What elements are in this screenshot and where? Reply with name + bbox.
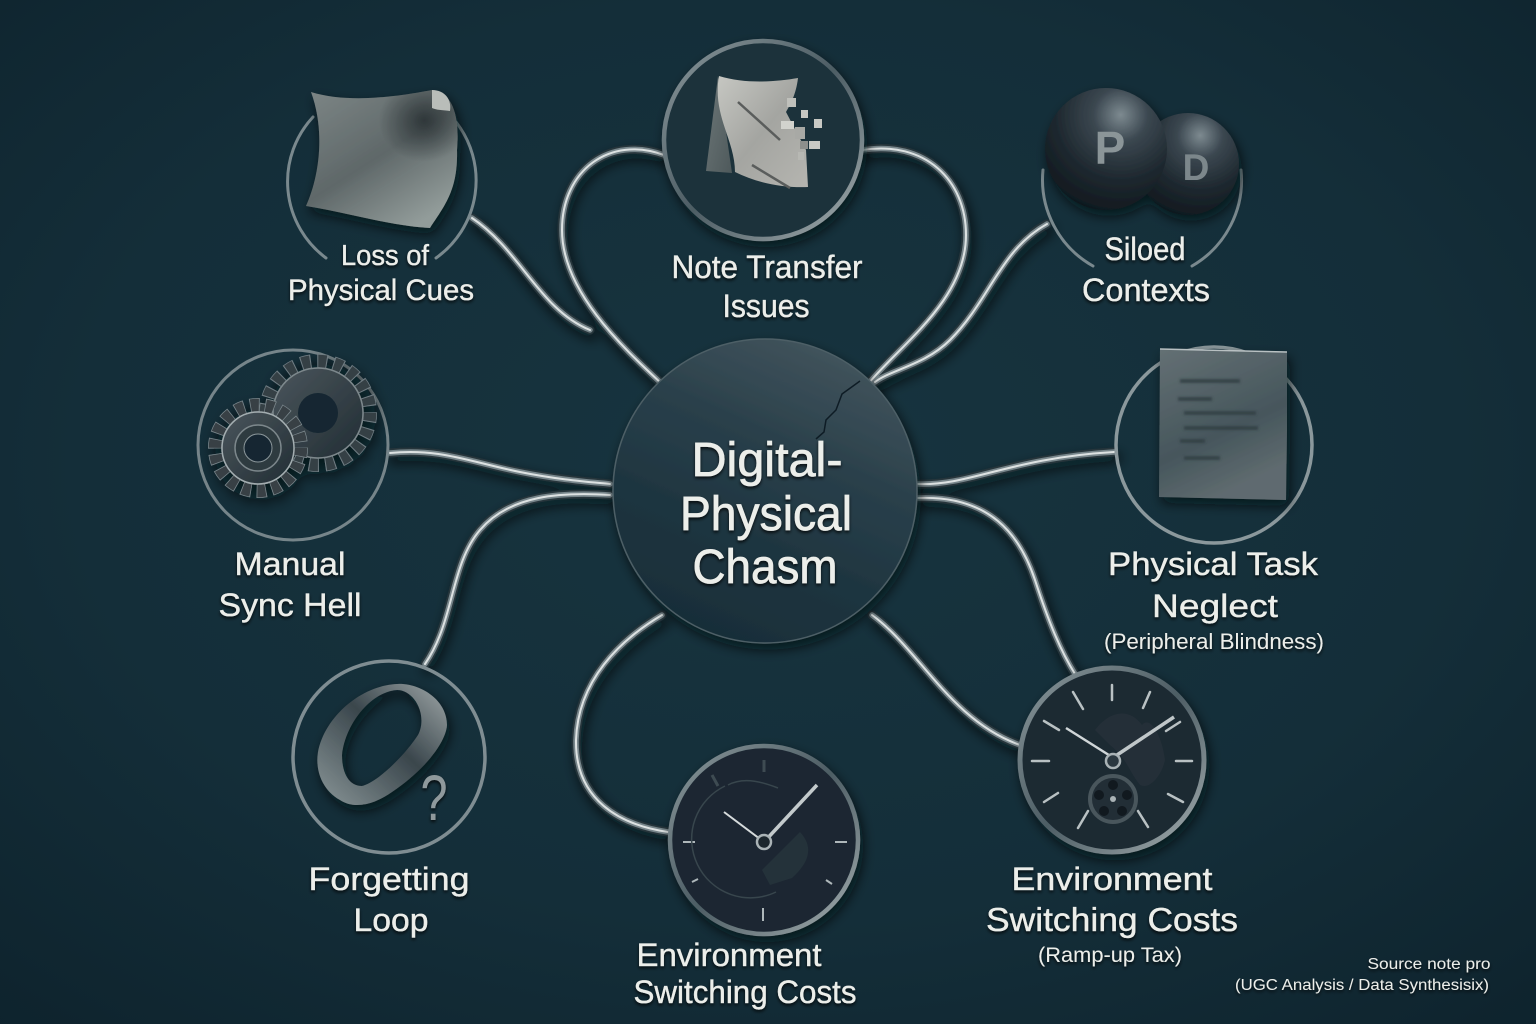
node: Environment Switching Costs (Ramp-up Tax): (Ramp-up Tax): [1038, 944, 1182, 967]
node: Environment Switching Costs (bottom): Environment: [636, 937, 822, 973]
source note: (UGC Analysis / Data Synthesisix): [1235, 977, 1489, 994]
icon: P and D spheres: D: [1183, 147, 1209, 188]
node: Environment Switching Costs (Ramp-up Tax): Switching Costs: [986, 901, 1238, 938]
icon: paper dissolving into pixels: [706, 76, 822, 188]
node: Physical Task Neglect: Neglect: [1152, 588, 1278, 624]
node: Environment Switching Costs (Ramp-up Tax): Environment: [1012, 861, 1213, 897]
icon: twisted metal loop with question mark: ?: [420, 762, 448, 834]
node: Note Transfer Issues: Note Transfer: [672, 249, 863, 285]
source note: [1235, 956, 1490, 994]
ring: [198, 350, 388, 540]
node: Environment Switching Costs (bottom): [634, 746, 858, 1010]
node: Environment Switching Costs (bottom): Switching Costs: [634, 974, 856, 1010]
node: Loss of Physical Cues: [288, 90, 476, 307]
icon: twisted metal loop with question mark: [317, 684, 448, 834]
node: Note Transfer Issues: [664, 41, 863, 324]
central hub: Digital-Physical Chasm: Chasm: [692, 541, 838, 594]
node: Siloed Contexts: Siloed: [1104, 231, 1186, 267]
node: Physical Task Neglect: [1104, 347, 1324, 654]
node: Environment Switching Costs (Ramp-up Tax): [986, 668, 1238, 967]
ring: [1043, 170, 1242, 266]
node: Forgetting Loop: [293, 661, 485, 938]
ring: [288, 117, 476, 258]
connector wires: [390, 148, 1114, 832]
node: Loss of Physical Cues: Physical Cues: [288, 274, 474, 307]
node: Loss of Physical Cues: Loss of: [341, 240, 430, 272]
node: Manual Sync Hell: Manual: [234, 546, 346, 582]
ring: [293, 661, 485, 853]
node: Physical Task Neglect: (Peripheral Blindness): [1104, 629, 1324, 654]
icon: P and D spheres: [1045, 88, 1239, 215]
node: Note Transfer Issues: Issues: [722, 288, 810, 324]
node: Manual Sync Hell: Sync Hell: [218, 587, 362, 623]
node: Forgetting Loop: Loop: [354, 902, 428, 938]
central hub: Digital-Physical Chasm: [613, 339, 917, 643]
node: Physical Task Neglect: Physical Task: [1108, 546, 1319, 582]
node: Manual Sync Hell: [198, 350, 388, 623]
source note: Source note pro: [1368, 956, 1490, 973]
icon: clock face: [670, 746, 858, 934]
icon: watch with exposed gear: [1020, 668, 1204, 852]
ring: [1116, 347, 1312, 543]
ring: [664, 41, 862, 239]
central hub: Digital-Physical Chasm: Digital-: [692, 434, 842, 487]
node: Siloed Contexts: Contexts: [1082, 272, 1210, 308]
icon: blurred document: [1159, 349, 1287, 500]
node: Forgetting Loop: Forgetting: [308, 861, 470, 897]
node: Siloed Contexts: [1043, 88, 1242, 308]
icon: sticky note with curled corner: [306, 90, 458, 228]
central hub: Digital-Physical Chasm: Physical: [680, 488, 852, 541]
icon: P and D spheres: P: [1095, 122, 1125, 174]
icon: interlocking gears: [215, 361, 370, 491]
